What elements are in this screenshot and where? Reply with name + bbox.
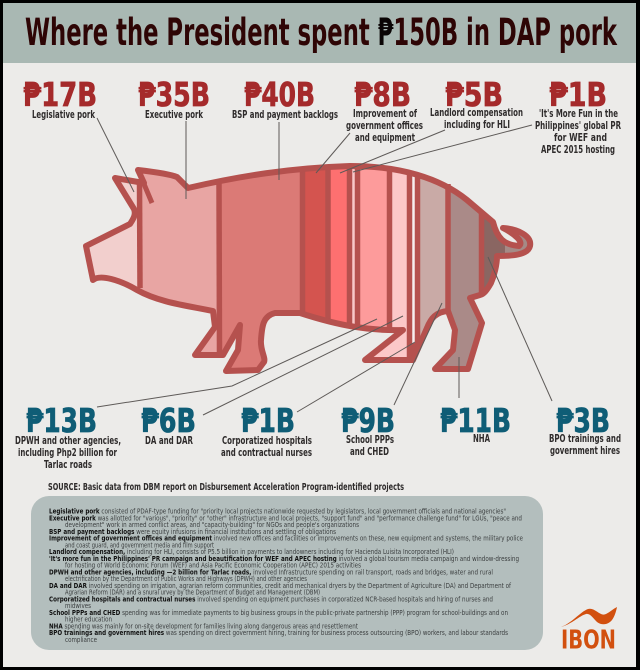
notes text: higher education — [65, 616, 112, 624]
stat: DPWH — [15, 401, 121, 471]
stat: NHA — [440, 401, 511, 445]
stat: global PR — [535, 75, 621, 156]
stat: executive pork: Executive pork — [145, 109, 204, 121]
stat: DPWH: including Php2 billion for — [18, 447, 118, 459]
stat: school PPPs — [341, 401, 395, 458]
stat: DPWH: ₱13B — [26, 401, 97, 440]
notes text: electrification by the Department of Public Works and Highways (DPWH) and other agencies — [65, 575, 307, 583]
stat: legislative pork: Legislative pork — [32, 109, 96, 121]
stat: executive pork: ₱35B — [138, 75, 210, 114]
notes text: BSP and payment backlogs were equity infusions in financial institutions and settling of obligations — [49, 528, 336, 536]
notes text: Improvement of government offices and equipment involved new offices and facilities or improvements on these, new equipment and systems, the military police — [49, 534, 523, 542]
notes text: Executive pork was allotted for "various", "priority" or "other" infrastructure and local projects, "support fund" and "performance challenge fund" for LGUs, "peace and — [49, 514, 522, 522]
notes text: Legislative pork consisted of PDAF-type funding for "priority local projects nationwide requested by legislators, local government officials and national agencies" — [49, 508, 506, 516]
stat: corporatized hospitals: ₱1B — [241, 401, 295, 440]
stat: NHA: ₱11B — [440, 401, 511, 440]
notes text: DA and DAR involved spending on irrigation, agrarian reform communities, credit and mechanical dryers by the Department of Agriculture (DA) and Department of — [49, 582, 511, 590]
stat: legislative pork — [23, 75, 97, 121]
source line: SOURCE: Basic data from DBM report on Disbursement Acceleration Program-identified projects — [48, 482, 404, 493]
notes text: BPO trainings and government hires was spending on direct government hiring, training for business process outsourcing (BPO) workers, and labour standards — [49, 629, 508, 637]
notes text: Landlord compensation, including for HLI, consists of P5.5 billion in payments to landowners including for Hacienda Luisita Incorporated (HLI) — [49, 548, 454, 556]
stat: landlord compensation — [430, 75, 523, 131]
notes text — [49, 508, 523, 644]
stat: DA and DAR: ₱6B — [141, 401, 196, 440]
stat: government offices: government offices — [346, 120, 423, 132]
pig chart — [80, 160, 542, 375]
notes text: compliance — [65, 636, 97, 644]
notes text: 'It's more fun in the Philippines' PR campaign and beautification for WEF and APEC hosting involved a global tourism media campaign and window-dressing — [49, 555, 519, 563]
stat: school PPPs: ₱9B — [341, 401, 395, 440]
stat: landlord compensation: Landlord compensation — [430, 107, 523, 119]
stat: corporatized hospitals: Corporatized hospitals — [222, 435, 312, 447]
IBON logo: IBON — [561, 626, 616, 656]
stat: landlord compensation: ₱5B — [445, 75, 503, 114]
stat: government offices: and equipment — [355, 132, 415, 144]
stat: legislative pork: ₱17B — [23, 75, 97, 114]
leader lines — [97, 118, 552, 415]
notes text: for hosting of World Economic Forum (WEF) and Asia Pacific Economic Cooperation (APEC) 2015 activities — [65, 562, 361, 570]
stat: DPWH: Tarlac roads — [44, 459, 92, 471]
pig section dividers — [140, 166, 482, 360]
notes text: Corporatized hospitals and contractual nurses involved spending on equipment purchases in corporatized NCR-based hospitals and hiring of nurses and — [49, 595, 493, 603]
notes text: development" work in armed conflict areas, and "capacity-building" for NGOs and people's organizations — [65, 521, 359, 529]
notes text: Agrarian Reform (DAR) and a snural urvey by the Department of Budget and Management (DBM) — [65, 588, 320, 596]
pig outline — [86, 166, 530, 371]
stat: executive pork — [138, 75, 210, 121]
stat: corporatized hospitals — [221, 401, 312, 459]
stat: BSP and payment backlogs: BSP and payment backlogs — [232, 109, 338, 121]
stat: corporatized hospitals: and contractual nurses — [221, 447, 312, 459]
stat: government offices: ₱8B — [354, 75, 411, 114]
stat: global PR: for WEF and — [554, 132, 607, 144]
IBON logo — [561, 607, 617, 656]
stat: government offices — [346, 75, 423, 144]
stat: DA and DAR: DA and DAR — [145, 435, 193, 447]
ear flap — [138, 170, 152, 203]
stat: school PPPs: and CHED — [350, 446, 389, 458]
notes text: midwives — [65, 602, 91, 610]
stat: NHA: NHA — [473, 433, 491, 445]
stat: government offices: Improvement of — [353, 108, 417, 120]
notes text: NHA spending was mainly for on-site development for families living along dangerous areas and resettlement — [49, 622, 358, 630]
stat: BSP and payment backlogs: ₱40B — [244, 75, 315, 114]
notes text: and coast guard, and government media and film support — [65, 541, 214, 549]
stat: global PR: ₱1B — [549, 75, 607, 114]
stat: DPWH: DPWH and other agencies, — [15, 435, 121, 447]
notes text: DPWH and other agencies, including —2 billion for Tarlac roads, involved Infrastructure spending on rail transport, roads and bridges, water and rural — [49, 568, 493, 576]
title banner — [3, 3, 636, 63]
stat: school PPPs: School PPPs — [346, 434, 394, 446]
stat: BPO: ₱3B — [556, 401, 610, 440]
far hind leg wedge — [407, 343, 419, 363]
stat: landlord compensation: including for HLI — [444, 119, 510, 131]
notes text: School PPPs and CHED spending was for immediate payments to big business groups in the public-private partnership (PPP) program for school-buildings and on — [49, 609, 508, 617]
stat: DA and DAR — [141, 401, 196, 447]
stat: BPO — [549, 401, 621, 457]
notes panel — [31, 496, 543, 650]
